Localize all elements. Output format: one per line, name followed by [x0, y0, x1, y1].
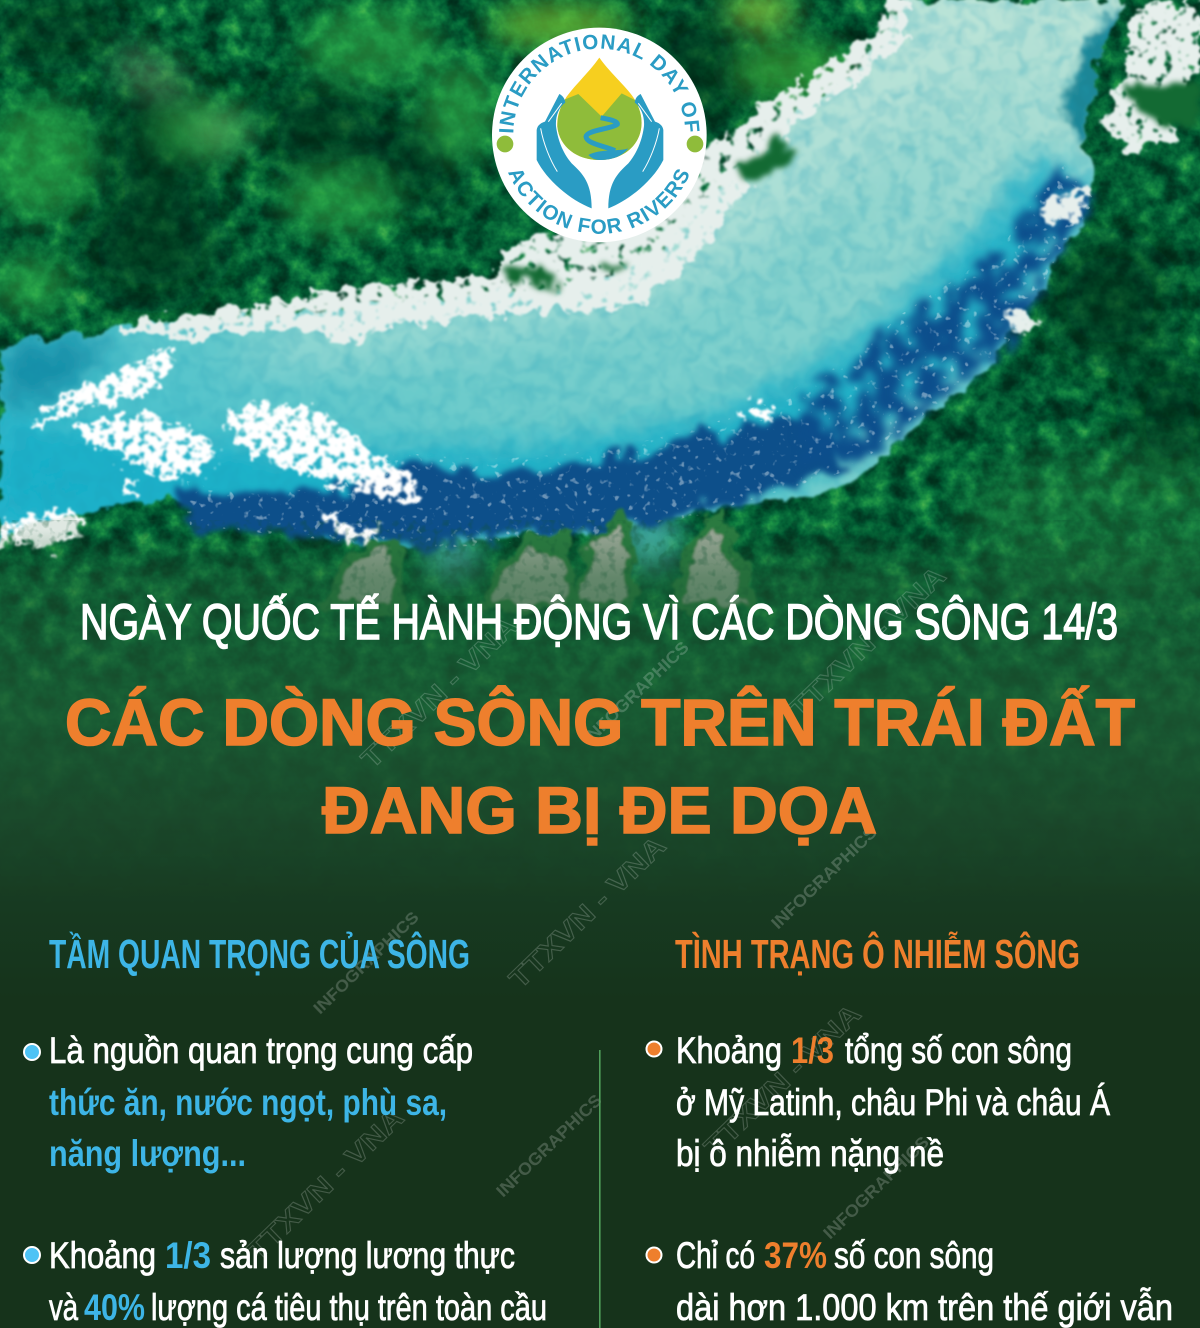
background photo: aerial view of river through forest: [0, 0, 1200, 902]
watermarks: INFOGRAPHICS: [820, 1133, 933, 1243]
white specks in the dark band: [186, 166, 1092, 548]
dark teal upper right edge: [1060, 0, 1125, 150]
logo: International Day of Action for Rivers: [492, 28, 707, 242]
water speckle: [82, 0, 1116, 512]
item 2 text: và: [49, 1287, 78, 1328]
item 2 text: 37%: [764, 1235, 827, 1276]
item 2 text: sản lượng lương thực: [220, 1235, 515, 1276]
rock moss base: [320, 510, 755, 615]
item 2 text: [49, 1235, 547, 1328]
item 1 text: ở Mỹ Latinh, châu Phi và châu Á: [676, 1082, 1110, 1123]
panel: importance of rivers: [24, 931, 547, 1328]
main title: CÁC DÒNG SÔNG TRÊN TRÁI ĐẤT: [65, 685, 1135, 759]
panel: river pollution: [646, 931, 1173, 1328]
teal left shadow: [0, 335, 120, 410]
logo water drop: [557, 58, 642, 160]
main title: [65, 685, 1135, 847]
dark blue pools: [180, 417, 850, 545]
lighter pools at bottom of channel: [426, 508, 680, 581]
item 2 text: lượng cá tiêu thụ trên toàn cầu: [151, 1287, 547, 1328]
grey rock outcrops: [20, 510, 755, 615]
white rapids: [0, 345, 771, 545]
rock faces: [340, 525, 742, 605]
aqua lower channel: [0, 150, 1100, 540]
item 1 text: [49, 1030, 473, 1174]
column divider: [599, 1050, 601, 1328]
lower forest bright floor: [960, 450, 1200, 590]
item 1 text: tổng số con sông: [845, 1030, 1072, 1071]
item 2 text: [676, 1235, 1173, 1328]
logo arc text top: INTERNATIONAL DAY OF: [499, 34, 700, 132]
bullet 2: [24, 1247, 40, 1263]
bullet 2: [646, 1248, 662, 1262]
watermarks: TTXVN - VNA: [698, 998, 867, 1162]
item 2 text: số con sông: [834, 1235, 994, 1276]
gradient fade to footer: [0, 530, 1200, 1000]
item 1 text: năng lượng...: [49, 1133, 246, 1174]
pale central water: [220, 0, 1040, 375]
item 2 text: Khoảng: [49, 1235, 156, 1276]
item 2 text: 1/3: [165, 1235, 211, 1276]
green islands on the bank: [504, 80, 1200, 286]
watermarks: TTXVN - VNA: [503, 830, 672, 994]
logo green dots: [497, 136, 703, 152]
bullet 1: [24, 1044, 40, 1060]
main title: ĐANG BỊ ĐE DỌA: [322, 773, 877, 847]
item 1 text: 1/3: [791, 1030, 834, 1071]
bullet 1: [646, 1042, 662, 1056]
logo hands: [537, 94, 663, 208]
item 1 text: thức ăn, nước ngọt, phù sa,: [49, 1082, 447, 1123]
logo disc: [492, 28, 707, 242]
item 1 text: Là nguồn quan trọng cung cấp: [49, 1030, 473, 1071]
logo arc text bottom: ACTION FOR RIVERS: [508, 169, 689, 234]
white rock banks: [120, 0, 1200, 342]
watermarks: TTXVN - VNA: [355, 610, 524, 774]
item 1 text: bị ô nhiễm nặng nề: [676, 1133, 944, 1174]
river body: [0, 0, 1127, 550]
watermarks: INFOGRAPHICS: [580, 638, 693, 748]
watermarks: INFOGRAPHICS: [493, 1091, 606, 1201]
watermarks: TTXVN - VNA: [783, 560, 952, 724]
bright canopy highlights: [0, 5, 500, 315]
forest shadow masses: [0, 0, 1200, 480]
item 2 text: 40%: [84, 1287, 145, 1328]
watermarks: [241, 560, 952, 1266]
item 1 text: Khoảng: [676, 1030, 782, 1071]
watermarks: TTXVN - VNA: [241, 1102, 410, 1266]
item 2 text: Chỉ có: [676, 1235, 755, 1276]
broken dark pools upstream: [800, 160, 1095, 470]
item 1 text: [676, 1030, 1110, 1174]
watermarks: INFOGRAPHICS: [310, 908, 423, 1018]
watermarks: INFOGRAPHICS: [768, 823, 881, 933]
heading: importance: TẦM QUAN TRỌNG CỦA SÔNG: [49, 931, 470, 977]
vegetation around rocks: [0, 520, 1200, 630]
pale tree crowns and lime patches: [104, 0, 850, 150]
